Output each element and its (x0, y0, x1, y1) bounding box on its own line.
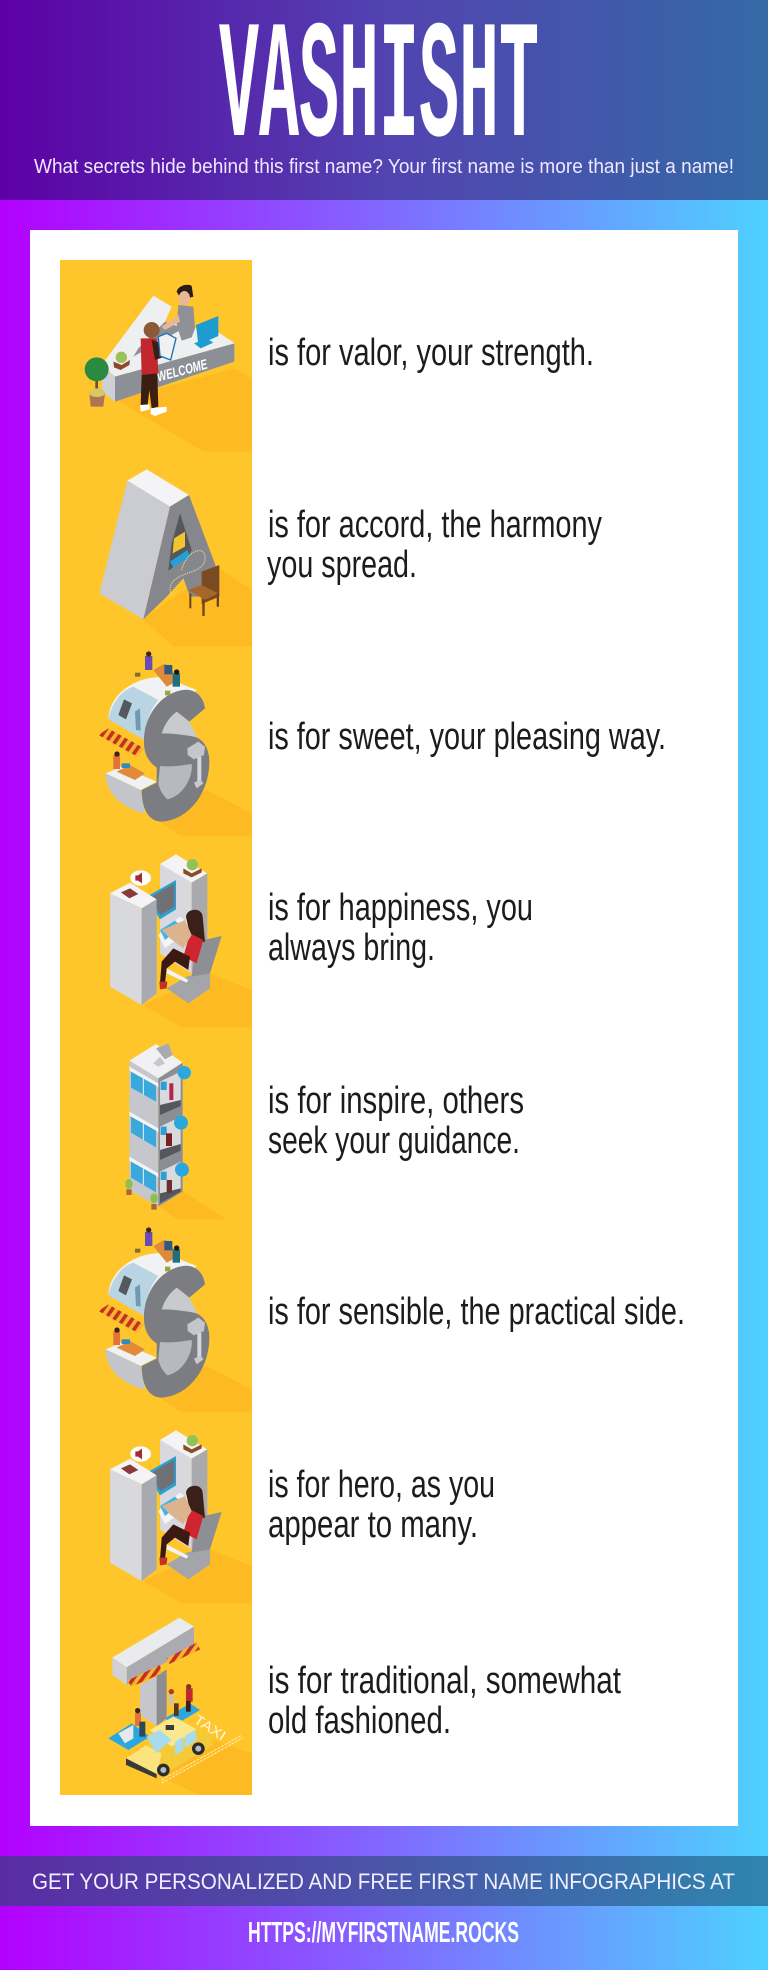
footer URL: HTTPS://MYFIRSTNAME.ROCKS (248, 1917, 519, 1949)
icon: letter H desk (110, 854, 252, 1027)
icon: letter V reception desk (85, 285, 252, 452)
footer call-to-action band: GET YOUR PERSONALIZED AND FREE FIRST NAME INFOGRAPHICS AT (32, 1869, 735, 1894)
text: I lines: is for inspire, others (268, 1080, 524, 1122)
text: H lines 2: appear to many. (268, 1504, 478, 1546)
text: H lines: always bring. (268, 927, 435, 969)
text: I lines: seek your guidance. (268, 1120, 520, 1162)
icon: letter V reception desk: WELCOME (155, 356, 209, 385)
text: V line: is for valor, your strength. (268, 332, 594, 374)
icon: letter T taxi stand (108, 1618, 252, 1795)
icon: letter S offices (98, 651, 252, 836)
text: T lines: is for traditional, somewhat (268, 1660, 621, 1702)
icon: letter H desk repeat (110, 1430, 252, 1603)
white content panel (30, 230, 738, 1826)
text: H lines (268, 887, 533, 969)
text: H lines: is for happiness, you (268, 887, 533, 929)
text: A lines: you spread. (267, 544, 417, 586)
text: I lines (268, 1080, 524, 1162)
icon: letter T taxi stand: TAXI (191, 1711, 229, 1744)
text: T lines: old fashioned. (268, 1700, 451, 1742)
text: H lines 2 (268, 1464, 495, 1546)
header band (0, 0, 768, 200)
footer call-to-action band (0, 1856, 768, 1906)
subtitle: What secrets hide behind this first name? Your first name is more than just a name! (34, 156, 734, 178)
text: A lines (267, 504, 602, 586)
text: T lines (268, 1660, 621, 1742)
yellow illustration strip (60, 260, 252, 1795)
icon: letter I tower (125, 1043, 227, 1219)
icon: letter S offices repeat (98, 1227, 252, 1412)
text: H lines 2: is for hero, as you (268, 1464, 495, 1506)
icon: letter A with workspace (99, 469, 252, 647)
text: A lines: is for accord, the harmony (268, 504, 602, 546)
